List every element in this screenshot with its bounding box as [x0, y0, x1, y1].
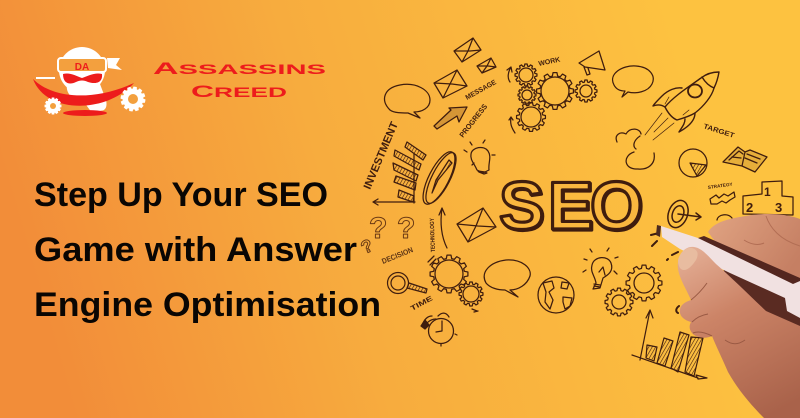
icon: marker shadow [722, 265, 800, 330]
icon: puzzle [710, 192, 735, 204]
illustration: SEO doodles [358, 38, 793, 379]
label: DECISION: DECISION [380, 245, 414, 266]
icon: question marks [358, 212, 415, 258]
label: WORK: WORK [538, 57, 561, 68]
icon: pie disc [417, 148, 462, 208]
icon: fingers [708, 214, 800, 290]
icon: white gear large [118, 84, 148, 114]
icon: speech bubble [385, 84, 430, 118]
label: TECHNOLOGY: TECHNOLOGY [430, 218, 437, 252]
icon: light bulb [464, 140, 495, 174]
icon: podium: 2 [746, 200, 753, 215]
icon: envelopes [434, 38, 496, 98]
label: INVESTMENT: INVESTMENT [362, 120, 401, 191]
icon: investment bars [373, 142, 426, 205]
icon: speech bubble 2 [613, 66, 653, 97]
title [34, 176, 381, 324]
icon: ink marks near pen [651, 233, 679, 313]
icon: gear hole small [50, 103, 56, 109]
icon: marker [656, 225, 800, 318]
brand name line 2: C REED [191, 82, 287, 101]
icon: gears work [507, 64, 597, 133]
label: PROGRESS: PROGRESS [457, 102, 489, 139]
icon: pie chart [679, 149, 707, 177]
icon: speech bubble 3 [484, 260, 530, 297]
icon: skin creases [691, 283, 745, 344]
icon: rocket [645, 72, 719, 140]
title: Step Up Your SEO [34, 176, 328, 214]
icon: smoke cloud [616, 129, 654, 169]
icon: question marks: ? [358, 235, 376, 258]
icon: red sword swoosh [33, 79, 134, 106]
icon: growth chart [632, 310, 707, 379]
icon: gear hole large [128, 94, 138, 104]
SEO lettering: SEO [499, 168, 643, 244]
icon: question marks: ? [369, 212, 387, 245]
icon: progress arrow [434, 107, 467, 129]
icon: curved arrow [439, 208, 447, 248]
logo initials: DA [75, 62, 89, 73]
icon: light bulb 2 [583, 248, 618, 289]
logo [33, 47, 326, 116]
brand name line 1: A SSASSINS [153, 59, 326, 78]
icon: alarm clock [421, 313, 457, 346]
icon: podium: 1 [764, 185, 771, 199]
icon: megaphone [579, 51, 605, 75]
icon: ninja mascot [36, 47, 122, 113]
label: STRATEGY: STRATEGY [707, 182, 733, 190]
label: MESSAGE: MESSAGE [465, 79, 498, 102]
icon: white gear small [45, 98, 61, 114]
icon: magnifier [388, 272, 427, 294]
label: TARGET: TARGET [702, 123, 736, 140]
illustration: hand holding marker [656, 214, 800, 418]
icon: envelope lower [457, 208, 496, 242]
title: Engine Optimisation [34, 286, 381, 324]
icon: thumbnail [678, 248, 698, 270]
icon: red shadow [63, 110, 107, 116]
icon: partial circle [717, 215, 732, 220]
icon: dartboard [664, 198, 701, 230]
icon: gears technology [428, 255, 483, 312]
icon: globe [538, 277, 574, 313]
label: TIME: TIME [410, 295, 435, 313]
icon: podium: 3 [775, 200, 782, 215]
icon: thumb and palm [678, 247, 800, 418]
icon: question marks: ? [397, 212, 415, 245]
icon: gears lower [605, 265, 662, 316]
icon: finger crease [744, 216, 800, 246]
icon: podium [743, 181, 793, 215]
title: Game with Answer [34, 231, 357, 269]
icon: book [723, 147, 767, 172]
